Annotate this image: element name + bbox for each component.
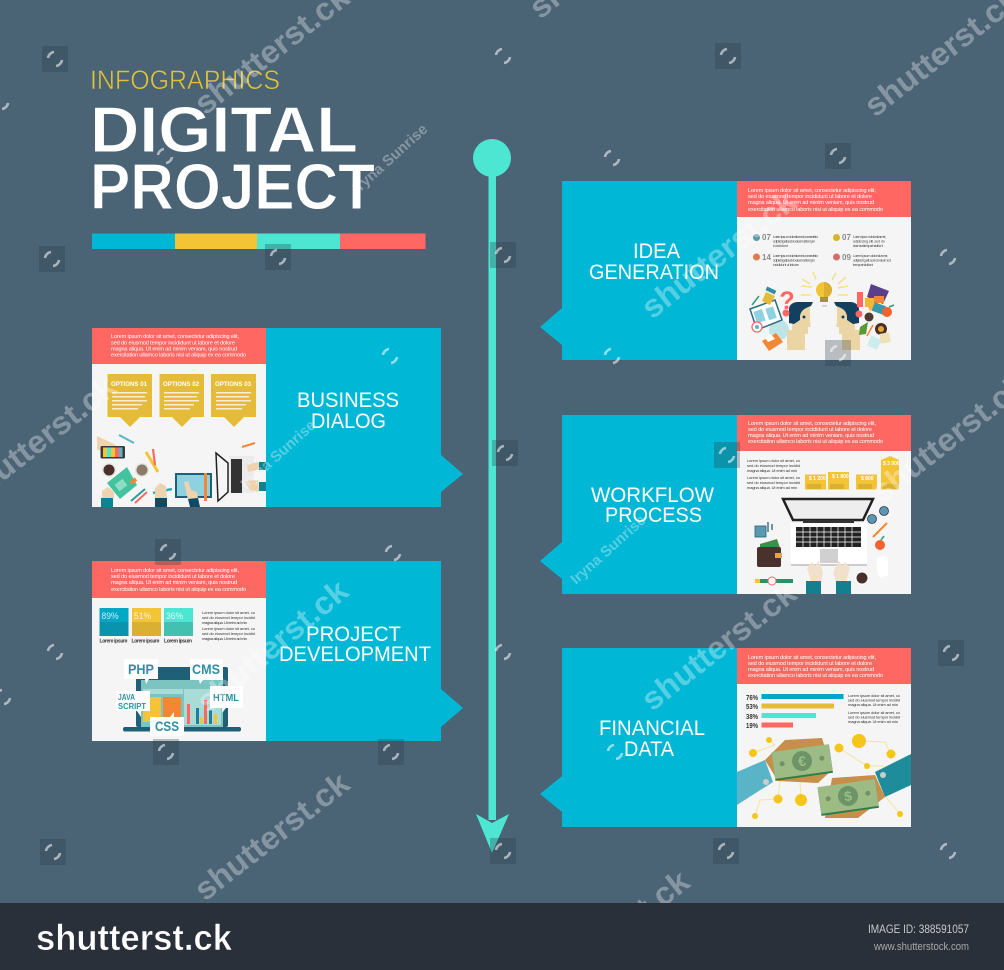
red text block: Lorem ipsum dolor sit amet, consectetur adipiscing elit, bbox=[748, 421, 876, 427]
heading: idea generation: GENERATION bbox=[589, 261, 719, 284]
red text block bbox=[737, 648, 911, 684]
bubble: PHP: PHP bbox=[128, 661, 154, 677]
heading: workflow process: WORKFLOW bbox=[591, 484, 714, 507]
watermark: stock text: shutterst.ck bbox=[187, 765, 356, 908]
bubble: CSS: CSS bbox=[155, 718, 179, 734]
red text block: sed do eiusmod tempor incididunt ut labore et dolore bbox=[748, 427, 872, 433]
illustration: laptop on desk bbox=[755, 499, 888, 594]
heading: financial data: FINANCIAL bbox=[599, 717, 705, 740]
heading: idea generation: IDEA bbox=[633, 240, 680, 263]
side text: sed do eiusmod tempor incidid bbox=[202, 631, 255, 636]
blue tab bbox=[540, 181, 737, 360]
side text bbox=[202, 610, 256, 641]
bar chart: 38% bbox=[746, 714, 759, 721]
gold price blocks bbox=[805, 456, 900, 490]
illustration: money exchange bbox=[737, 734, 911, 819]
side text: Lorem ipsum dolor sit amet, co bbox=[202, 626, 256, 631]
stats list: Lorem ipsum dolor sit amet, bbox=[853, 234, 886, 239]
heading: business dialog bbox=[297, 389, 399, 433]
side text: sed do eiusmod tempor incidid bbox=[848, 698, 900, 702]
watermark: author name: Iryna Sunrise bbox=[349, 121, 431, 197]
bubble: JAVA SCRIPT bbox=[116, 691, 150, 717]
percent tiles bbox=[100, 608, 193, 644]
illustration: desk with hands bbox=[97, 435, 266, 507]
red text block bbox=[737, 181, 911, 217]
colour bar bbox=[92, 234, 426, 249]
blue tab bbox=[266, 328, 463, 507]
percent tiles: 51% bbox=[134, 611, 151, 622]
red text block bbox=[737, 415, 911, 451]
side text: sed do eiusmod tempor incidid bbox=[747, 480, 800, 485]
card bbox=[737, 217, 911, 360]
gold price blocks: $ 3 000 bbox=[883, 461, 900, 467]
watermark: author name: Iryna Sunrise bbox=[237, 417, 319, 493]
image id: IMAGE ID: 388591057 bbox=[868, 924, 969, 936]
red text block: magna aliqua. Ut enim ad minim veniam, quis nostrud bbox=[748, 667, 874, 673]
bubble: CMS: CMS bbox=[192, 661, 220, 677]
red text block: magna aliqua. Ut enim ad minim veniam, quis nostrud bbox=[748, 200, 874, 206]
heading: workflow process: PROCESS bbox=[605, 504, 702, 527]
heading: workflow process bbox=[591, 484, 714, 527]
stats list: tempor incididunt bbox=[853, 262, 874, 267]
website: www.shutterstock.com bbox=[873, 941, 969, 953]
side text: sed do eiusmod tempor incidid bbox=[202, 615, 255, 620]
stats list: incididunt bbox=[773, 243, 789, 248]
side text: Lorem ipsum dolor sit amet, co bbox=[202, 610, 256, 615]
stats list: incididunt ut labore bbox=[773, 262, 800, 267]
bubble: JAVA SCRIPT: JAVA bbox=[118, 693, 135, 702]
bar chart: 19% bbox=[746, 723, 759, 730]
watermark: stock text: shutterst.ck bbox=[634, 183, 803, 326]
heading: business dialog: DIALOG bbox=[311, 410, 386, 433]
bubble: HTML: HTML bbox=[213, 693, 239, 704]
side text: sed do eiusmod tempor incidid bbox=[747, 463, 800, 468]
watermark: stock text: shutterst.ck bbox=[634, 575, 803, 718]
blue tab bbox=[266, 561, 463, 741]
percent tiles: Lorem ipsum bbox=[132, 638, 160, 644]
side text: magna aliqua. Ut enim ad min bbox=[848, 719, 898, 724]
red text block: Lorem ipsum dolor sit amet, consectetur adipiscing elit, bbox=[748, 655, 876, 661]
red text block: sed do eiusmod tempor incididunt ut labore et dolore bbox=[748, 661, 872, 667]
red text block bbox=[92, 561, 266, 598]
card bbox=[92, 598, 266, 741]
stats list: eiusmod tempor incididunt bbox=[853, 243, 884, 248]
side text: Lorem ipsum dolor sit amet, co bbox=[747, 458, 801, 463]
blue tab bbox=[540, 648, 737, 827]
illustration: money exchange: $ bbox=[843, 788, 853, 804]
stats list: Lorem ipsum dolor sit amet, consectetur bbox=[773, 253, 819, 258]
heading: project development bbox=[279, 623, 431, 666]
red text block: sed do eiusmod tempor incididunt ut labore et dolore bbox=[111, 340, 235, 346]
side text: magna aliqua. Ut enim ad min bbox=[747, 468, 797, 473]
card bbox=[92, 364, 266, 507]
footer bar bbox=[0, 903, 1004, 970]
side text bbox=[848, 693, 901, 724]
red text block: exercitation ullamco laboris nisi ut aliquip ex ea commodo bbox=[748, 207, 883, 213]
red text block: magna aliqua. Ut enim ad minim veniam, quis nostrud bbox=[748, 433, 874, 439]
options callouts: OPTIONS 01 bbox=[111, 381, 147, 388]
gold price blocks: $ 1 800 bbox=[832, 474, 849, 480]
red text block: magna aliqua. Ut enim ad minim veniam, quis nostrud bbox=[111, 346, 237, 352]
side text: magna aliqua. Ut enim ad min bbox=[202, 620, 247, 625]
card bbox=[737, 451, 911, 594]
title: digital project: PROJECT bbox=[90, 150, 375, 223]
red text block: Lorem ipsum dolor sit amet, consectetur adipiscing elit, bbox=[111, 568, 239, 574]
illustration: two heads and a bulb: ? bbox=[779, 287, 795, 315]
heading: project development: DEVELOPMENT bbox=[279, 643, 431, 666]
red text block bbox=[92, 328, 266, 364]
heading: project development: PROJECT bbox=[306, 623, 401, 646]
gold price blocks: $ 800 bbox=[861, 476, 874, 482]
footer logo: shutterst.ck bbox=[36, 917, 233, 958]
panel: workflow process bbox=[540, 415, 911, 594]
red text block: exercitation ullamco laboris nisi ut aliquip ex ea commodo bbox=[748, 439, 883, 445]
red text block: magna aliqua. Ut enim ad minim veniam, quis nostrud bbox=[111, 580, 237, 586]
blue tab bbox=[540, 415, 737, 594]
stats list: Lorem ipsum dolor sit amet, consectetur bbox=[773, 234, 819, 239]
bubble: JAVA SCRIPT: SCRIPT bbox=[118, 702, 146, 711]
red text block: exercitation ullamco laboris nisi ut aliquip ex ea commodo bbox=[748, 673, 883, 679]
side text: Lorem ipsum dolor sit amet, co bbox=[747, 475, 801, 480]
options callouts: OPTIONS 03 bbox=[215, 381, 251, 388]
red text block: exercitation ullamco laboris nisi ut aliquip ex ea commodo bbox=[111, 352, 246, 358]
red text block: exercitation ullamco laboris nisi ut aliquip ex ea commodo bbox=[111, 587, 246, 593]
heading: financial data bbox=[599, 717, 705, 761]
side text: sed do eiusmod tempor incidid bbox=[848, 714, 900, 720]
stats list: adipiscing elit, sed do eiusmod bbox=[853, 258, 891, 262]
bar chart: 76% bbox=[746, 695, 759, 702]
stats list bbox=[753, 233, 891, 267]
panel: project development bbox=[92, 561, 463, 741]
illustration: two heads and a bulb bbox=[750, 272, 894, 351]
heading: infographics: INFOGRAPHICS bbox=[90, 65, 280, 95]
side text: magna aliqua. Ut enim ad min bbox=[848, 702, 898, 707]
heading: idea generation bbox=[589, 240, 719, 284]
watermark: author name: Iryna Sunrise bbox=[567, 512, 649, 588]
side text: Lorem ipsum dolor sit amet, co bbox=[848, 710, 901, 715]
red text block: Lorem ipsum dolor sit amet, consectetur adipiscing elit, bbox=[111, 334, 239, 340]
red text block: sed do eiusmod tempor incididunt ut labore et dolore bbox=[111, 574, 235, 580]
heading: business dialog: BUSINESS bbox=[297, 389, 399, 412]
watermark: stock text: shutterst.ck bbox=[189, 572, 355, 719]
side text bbox=[747, 458, 801, 490]
panel: idea generation bbox=[540, 181, 911, 360]
options callouts bbox=[108, 374, 256, 427]
stats list: Lorem ipsum dolor sit amet, bbox=[853, 253, 888, 258]
bar chart: 53% bbox=[746, 704, 759, 711]
timeline arrow bbox=[473, 139, 511, 853]
watermark: author name bbox=[237, 121, 649, 588]
title: digital project: DIGITAL bbox=[90, 93, 358, 166]
heading: financial data: DATA bbox=[624, 738, 674, 761]
stats list: adipiscing elit, sed do bbox=[853, 238, 886, 244]
stats list: 14 bbox=[762, 253, 771, 262]
percent tiles: Lorem ipsum bbox=[164, 638, 193, 644]
side text: magna aliqua. Ut enim ad min bbox=[747, 485, 797, 490]
panel: business dialog bbox=[92, 328, 463, 507]
illustration: money exchange: € bbox=[797, 753, 807, 769]
stats list: 09 bbox=[842, 253, 851, 262]
stats list: 07 bbox=[762, 233, 771, 242]
options callouts: OPTIONS 02 bbox=[163, 381, 199, 388]
percent tiles: 89% bbox=[102, 611, 119, 622]
card bbox=[737, 684, 911, 827]
illustration: code laptop bbox=[116, 659, 243, 736]
red text block: Lorem ipsum dolor sit amet, consectetur adipiscing elit, bbox=[748, 188, 876, 194]
percent tiles: 36% bbox=[166, 611, 183, 622]
percent tiles: Lorem ipsum bbox=[100, 638, 128, 644]
side text: Lorem ipsum dolor sit amet, co bbox=[848, 693, 901, 698]
stats list: 07 bbox=[842, 233, 851, 242]
gold price blocks: $ 1 200 bbox=[809, 476, 826, 482]
stats list: adipiscing elit, sed do eiusmod tempor bbox=[773, 238, 816, 244]
side text: magna aliqua. Ut enim ad min bbox=[202, 636, 247, 641]
stats list: adipiscing elit, sed do eiusmod tempor bbox=[773, 258, 816, 262]
bar chart bbox=[746, 694, 844, 730]
red text block: sed do eiusmod tempor incididunt ut labore et dolore bbox=[748, 194, 872, 200]
panel: financial data bbox=[540, 648, 911, 827]
title: digital project bbox=[90, 93, 375, 223]
